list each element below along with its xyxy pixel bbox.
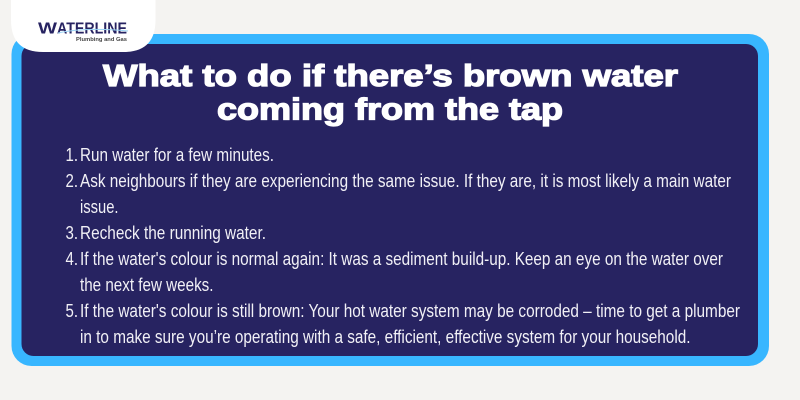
step 4 <box>66 249 723 295</box>
step 5 <box>66 301 740 347</box>
logo wordmark: W <box>38 20 57 38</box>
step 2: 2. <box>66 171 78 191</box>
panel: inner navy card <box>22 44 758 356</box>
step 4: the next few weeks. <box>80 275 214 295</box>
title: What to do if there’s brown water <box>103 58 678 93</box>
step 3: 3. <box>66 223 78 243</box>
title <box>103 58 678 126</box>
step 2 <box>66 171 731 217</box>
logo background <box>11 0 156 52</box>
title: coming from the tap <box>217 92 563 126</box>
logo wordmark: ATERLINE <box>57 20 127 38</box>
step 1: 1. <box>66 145 78 165</box>
step 5: in to make sure you’re operating with a safe, efficient, effective system for your household. <box>80 327 690 347</box>
step 4: 4. <box>66 249 78 269</box>
step 1: Run water for a few minutes. <box>80 145 274 165</box>
logo badge <box>11 0 156 52</box>
logo tagline: Plumbing and Gas <box>76 37 127 43</box>
logo wave <box>58 29 128 33</box>
step 5: 5. <box>66 301 78 321</box>
panel: outer blue frame <box>12 34 769 366</box>
step 3: Recheck the running water. <box>80 223 266 243</box>
numbered list <box>66 145 740 347</box>
step 2: issue. <box>80 197 118 217</box>
